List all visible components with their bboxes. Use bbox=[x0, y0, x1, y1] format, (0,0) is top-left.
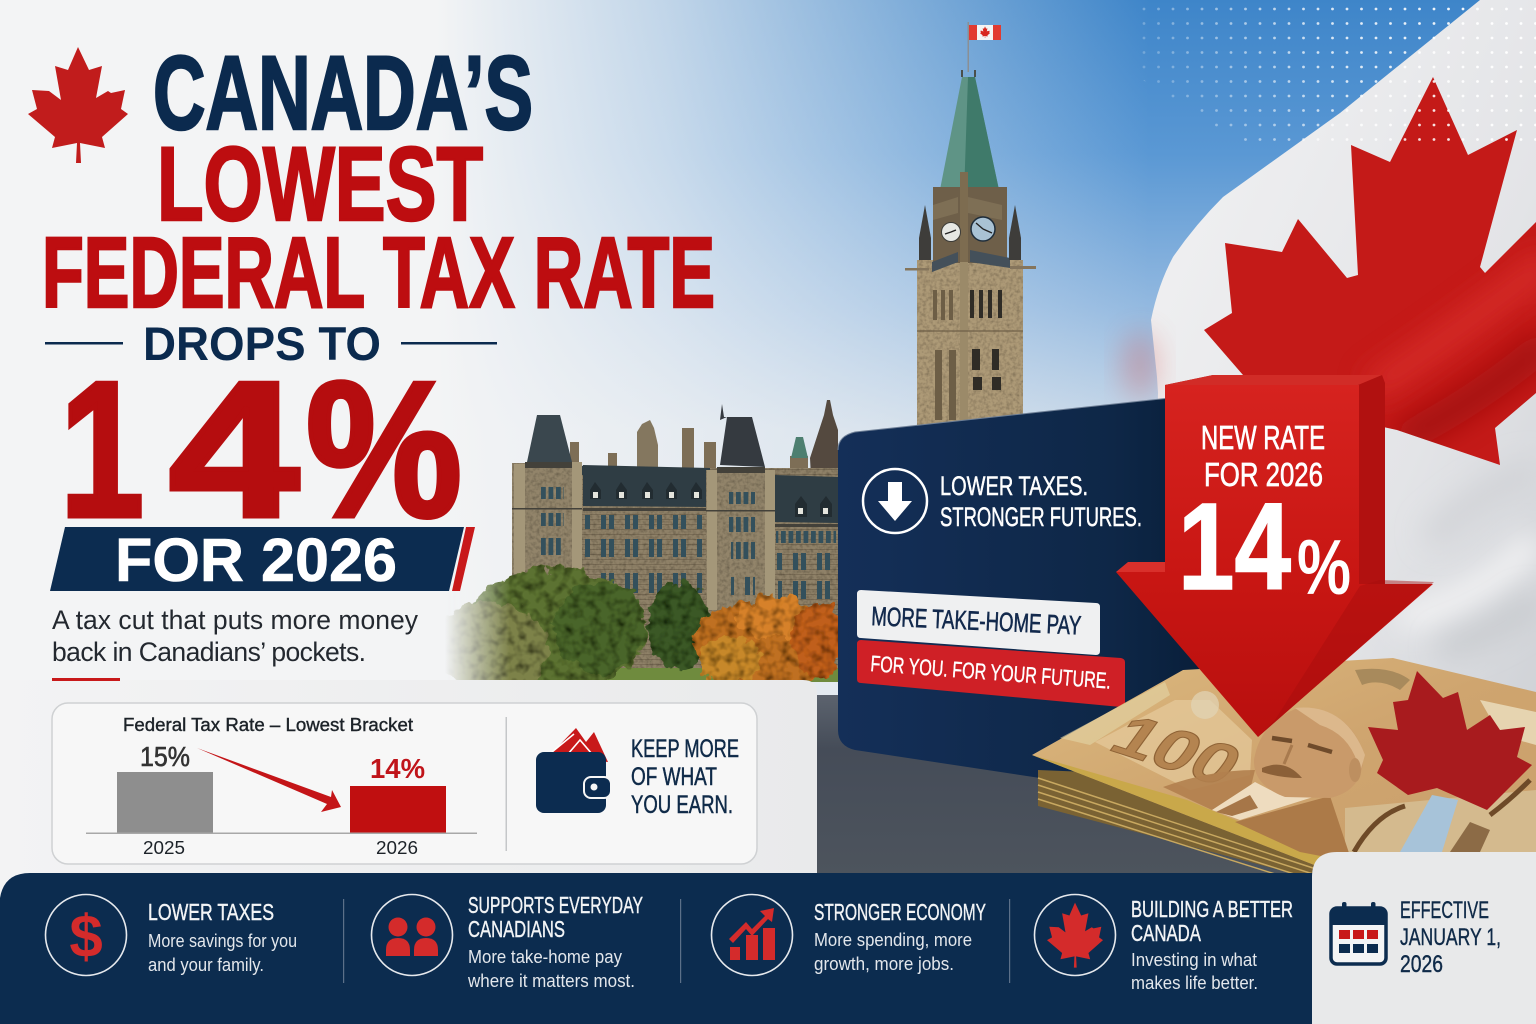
ground bbox=[817, 695, 1322, 875]
title bbox=[42, 35, 715, 329]
photo: peace tower bbox=[905, 22, 1036, 428]
label: more take-home pay bbox=[857, 590, 1100, 655]
benefit: stronger economy bbox=[712, 894, 986, 976]
arrow text: NEW RATE bbox=[1201, 419, 1325, 456]
icon: people bbox=[386, 918, 438, 956]
big red arrow bbox=[1116, 375, 1434, 737]
bar chart: 2026 bbox=[376, 838, 418, 858]
window rows bbox=[539, 487, 838, 599]
bill portrait bbox=[1163, 708, 1365, 862]
effective date text: 2026 bbox=[1400, 951, 1443, 978]
title: LOWEST bbox=[157, 126, 483, 243]
bar chart bbox=[86, 715, 477, 858]
divider lines bbox=[343, 899, 1010, 983]
subtitle: back in Canadians’ pockets. bbox=[52, 637, 366, 667]
label: for you for your future: FOR YOU. FOR YOUR FUTURE. bbox=[870, 651, 1112, 694]
icon: dollar: $ bbox=[69, 903, 103, 970]
arrow text: % bbox=[1297, 523, 1351, 611]
bar chart: 2025 bbox=[143, 838, 185, 858]
flagpole and flag bbox=[968, 22, 1001, 72]
sign tagline: STRONGER FUTURES. bbox=[940, 502, 1142, 532]
photo: trees bbox=[432, 568, 840, 694]
arrow text bbox=[1178, 419, 1351, 616]
effective date text bbox=[1400, 897, 1501, 978]
dormers bbox=[590, 482, 832, 517]
sign tagline bbox=[940, 471, 1142, 532]
label: more take-home pay: MORE TAKE-HOME PAY bbox=[871, 601, 1082, 641]
benefit: building a better canada: Investing in what bbox=[1131, 949, 1257, 970]
halftone dots bbox=[1135, 3, 1536, 145]
tower blocks bbox=[512, 463, 582, 603]
sign tagline: LOWER TAXES. bbox=[940, 471, 1088, 501]
panel: effective date bbox=[1312, 852, 1536, 1024]
photo: orange tree bbox=[694, 596, 846, 686]
benefit: building a better canada: makes life better. bbox=[1131, 972, 1258, 993]
benefit: supports everyday canadians bbox=[372, 892, 643, 991]
icon: calendar bbox=[1331, 902, 1386, 964]
benefit: stronger economy: STRONGER ECONOMY bbox=[814, 899, 986, 925]
bottom band bbox=[0, 873, 1320, 1024]
bar chart: 14% bbox=[370, 753, 425, 784]
title: FEDERAL TAX RATE bbox=[42, 217, 715, 329]
bar chart: Federal Tax Rate – Lowest Bracket bbox=[123, 715, 413, 735]
keep more text: YOU EARN. bbox=[631, 791, 733, 819]
money stack bbox=[1032, 658, 1536, 887]
benefit: lower taxes bbox=[46, 894, 297, 976]
keep more text: OF WHAT bbox=[631, 763, 717, 791]
benefit: lower taxes: LOWER TAXES bbox=[148, 899, 274, 925]
wall bbox=[512, 468, 838, 680]
benefit: supports everyday canadians: CANADIANS bbox=[468, 916, 565, 942]
photo: parliament west block bbox=[512, 400, 838, 680]
bill 100: 100 bbox=[1098, 703, 1255, 798]
icon: red maple leaf on money bbox=[1368, 671, 1532, 810]
big 14%: % bbox=[306, 341, 462, 557]
accent line bbox=[52, 678, 120, 681]
big flag leaf bbox=[1204, 77, 1536, 465]
icon: down arrow circle bbox=[863, 469, 927, 533]
roofs bbox=[527, 415, 572, 462]
icon: wallet bbox=[536, 728, 611, 813]
panel: white chart area bbox=[0, 680, 817, 880]
big 14% bbox=[60, 341, 462, 557]
flag folds bbox=[1400, 470, 1536, 650]
tower body bbox=[917, 260, 1023, 428]
flag background bbox=[1111, 0, 1536, 692]
benefit: lower taxes: and your family. bbox=[148, 954, 264, 975]
benefit: supports everyday canadians: where it matters most. bbox=[467, 970, 635, 991]
subtitle bbox=[52, 605, 419, 667]
subtitle: A tax cut that puts more money bbox=[52, 605, 419, 635]
keep more text: KEEP MORE bbox=[631, 735, 739, 763]
benefit: supports everyday canadians: More take-home pay bbox=[468, 946, 623, 967]
drops to: DROPS TO bbox=[143, 317, 381, 370]
title: CANADA’S bbox=[153, 35, 533, 152]
label: for you for your future bbox=[857, 640, 1125, 707]
banner: for 2026: FOR 2026 bbox=[115, 526, 397, 594]
benefit: supports everyday canadians: SUPPORTS EVERYDAY bbox=[468, 892, 643, 918]
icon: title maple leaf bbox=[28, 47, 128, 163]
chimneys and small towers bbox=[570, 420, 808, 484]
arrow: 15 to 14 bbox=[197, 748, 341, 812]
effective date text: JANUARY 1, bbox=[1400, 924, 1501, 951]
benefit: lower taxes: More savings for you bbox=[148, 930, 297, 951]
benefit: stronger economy: More spending, more bbox=[814, 929, 972, 950]
spire bbox=[937, 77, 1002, 205]
benefit: stronger economy: growth, more jobs. bbox=[814, 953, 954, 974]
bill texture bbox=[1060, 669, 1536, 852]
panel: navy sign bbox=[838, 398, 1230, 800]
arrow text: 14 bbox=[1178, 479, 1291, 616]
banner: for 2026 bbox=[50, 526, 475, 594]
effective date text: EFFECTIVE bbox=[1400, 897, 1489, 924]
benefit: building a better canada: BUILDING A BETTER bbox=[1131, 896, 1293, 922]
card: tax rate chart and wallet bbox=[52, 703, 757, 864]
clocks bbox=[942, 222, 960, 242]
tower windows bbox=[970, 290, 1002, 390]
big 14%: 4 bbox=[169, 341, 299, 557]
bar chart: 15% bbox=[140, 741, 190, 772]
arrow text: FOR 2026 bbox=[1204, 456, 1323, 493]
benefit: building a better canada bbox=[1034, 894, 1293, 993]
icon: growth chart bbox=[729, 908, 775, 960]
big 14%: 1 bbox=[60, 341, 144, 557]
benefit: building a better canada: CANADA bbox=[1131, 920, 1201, 946]
icon: maple leaf bbox=[1047, 903, 1103, 968]
keep more text bbox=[631, 735, 739, 819]
